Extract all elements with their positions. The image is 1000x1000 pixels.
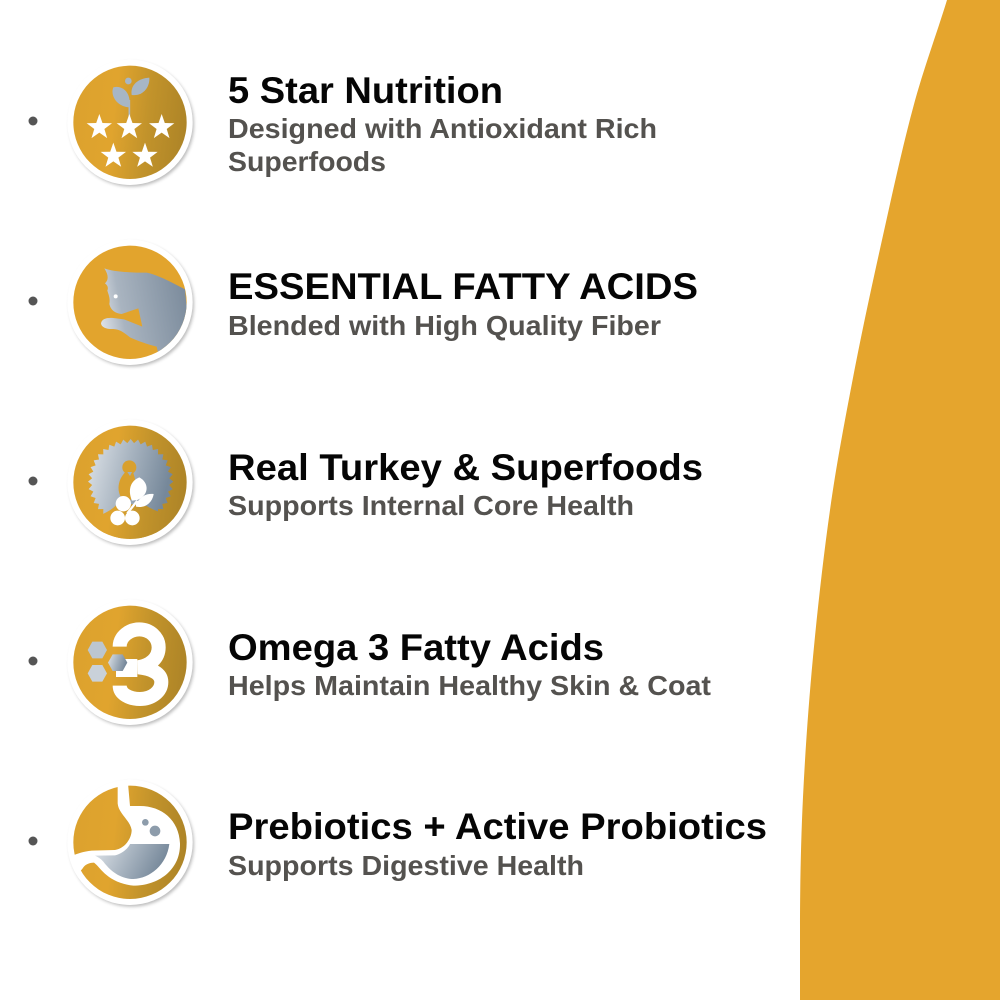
feature row: Essential Fatty Acids bbox=[28, 240, 698, 367]
heading: Prebiotics + Active Probiotics bbox=[228, 806, 767, 847]
bullet bbox=[28, 836, 38, 846]
icon: five stars with sprout bbox=[67, 60, 194, 187]
feature row: Omega 3 Fatty Acids bbox=[28, 600, 711, 727]
description: Superfoods bbox=[228, 146, 386, 177]
description: Supports Internal Core Health bbox=[228, 490, 634, 521]
heading: Real Turkey & Superfoods bbox=[228, 447, 703, 488]
icon: turkey with berries and leaves bbox=[67, 420, 194, 547]
description: Supports Digestive Health bbox=[228, 850, 584, 881]
description: Designed with Antioxidant Rich bbox=[228, 113, 657, 144]
bullet bbox=[28, 116, 38, 126]
bullet bbox=[28, 476, 38, 486]
icon: cat silhouette bbox=[67, 240, 194, 367]
heading: 5 Star Nutrition bbox=[228, 70, 503, 111]
feature row: Real Turkey and Superfoods bbox=[28, 420, 703, 547]
description: Helps Maintain Healthy Skin & Coat bbox=[228, 670, 711, 701]
heading: ESSENTIAL FATTY ACIDS bbox=[228, 266, 698, 307]
orange curved panel bbox=[800, 0, 1000, 1000]
icon: number three with hexagons bbox=[67, 600, 194, 727]
icon: stomach bbox=[67, 780, 194, 907]
feature row: Prebiotics and Active Probiotics bbox=[28, 780, 767, 907]
description: Blended with High Quality Fiber bbox=[228, 310, 661, 341]
heading: Omega 3 Fatty Acids bbox=[228, 627, 604, 668]
bullet bbox=[28, 296, 38, 306]
feature row: 5 Star Nutrition bbox=[28, 60, 657, 187]
bullet bbox=[28, 656, 38, 666]
description bbox=[228, 113, 657, 177]
